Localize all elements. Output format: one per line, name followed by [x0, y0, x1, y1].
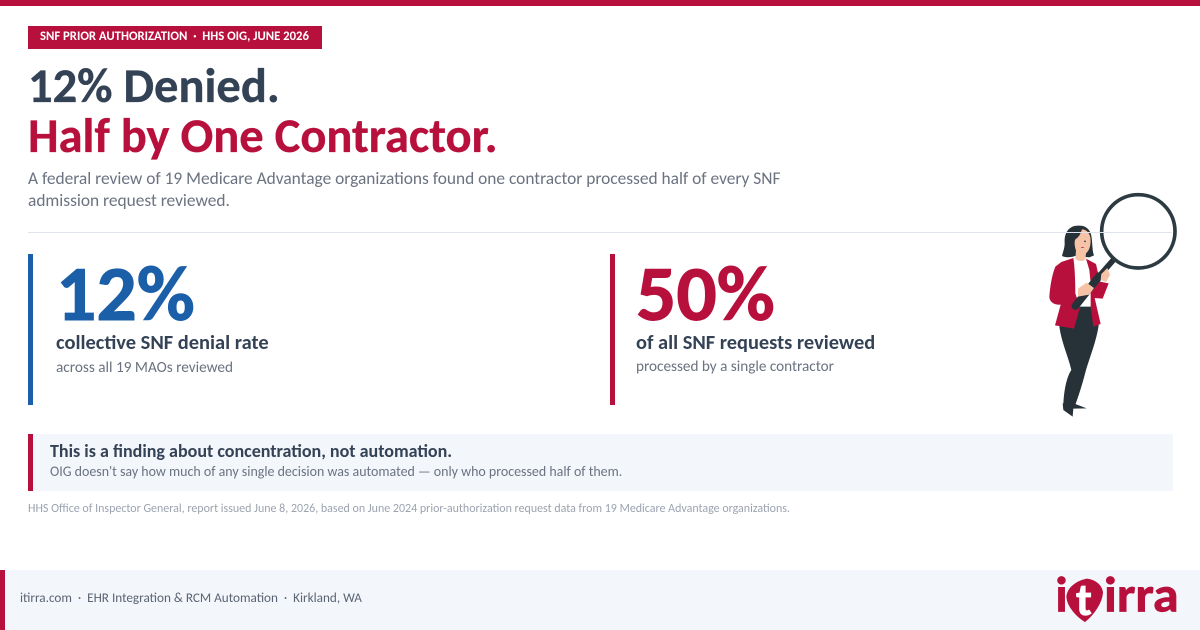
- logo: itirra: irra: [1104, 565, 1179, 626]
- logo: itirra: t: [1076, 572, 1092, 628]
- footer: [0, 570, 1200, 630]
- hair: [1062, 226, 1094, 257]
- logo: itirra: [1055, 565, 1179, 628]
- panel: stat 50 percent: of all SNF requests reviewed: [636, 331, 875, 355]
- shoes: [1063, 403, 1087, 417]
- callout: [28, 434, 1173, 491]
- red jacket: [1049, 258, 1080, 329]
- lens: [1102, 195, 1175, 268]
- title: [28, 57, 498, 166]
- title: Half by One Contractor.: [28, 107, 498, 166]
- panel: stat 50 percent: [610, 246, 875, 405]
- panel: stat 50 percent: 50%: [636, 246, 775, 341]
- trousers: [1059, 306, 1099, 407]
- lower hand: [1078, 283, 1094, 297]
- handle: [1099, 260, 1113, 276]
- footer: itirra.com · EHR Integration & RCM Automation · Kirkland, WA: [20, 589, 362, 606]
- face and neck: [1075, 229, 1091, 261]
- tag: report label: [28, 26, 322, 49]
- upper hand: [1101, 268, 1110, 282]
- tag: report label: SNF PRIOR AUTHORIZATION · HHS OIG, JUNE 2026: [40, 29, 309, 44]
- panel: stat 12 percent: [28, 246, 269, 405]
- panel: stat 12 percent: across all 19 MAOs reviewed: [56, 358, 233, 377]
- white shirt: [1073, 257, 1092, 307]
- panel: stat 50 percent: processed by a single contractor: [636, 358, 834, 376]
- panel: stat 12 percent: collective SNF denial rate: [56, 331, 269, 355]
- panel: stat 12 percent: 12%: [56, 246, 195, 341]
- subtitle: [28, 167, 780, 211]
- source note: HHS Office of Inspector General, report issued June 8, 2026, based on June 2024 prior-authorization request data from 19 Medicare Advantage organizations.: [28, 502, 790, 516]
- callout: OIG doesn't say how much of any single decision was automated — only who processed half of them.: [50, 463, 622, 480]
- title: 12% Denied.: [28, 57, 280, 116]
- subtitle: admission request reviewed.: [28, 189, 230, 211]
- logo: itirra: i: [1055, 565, 1068, 626]
- subtitle: A federal review of 19 Medicare Advantage organizations found one contractor processed half of every SNF: [28, 167, 780, 189]
- callout: This is a finding about concentration, not automation.: [50, 440, 452, 462]
